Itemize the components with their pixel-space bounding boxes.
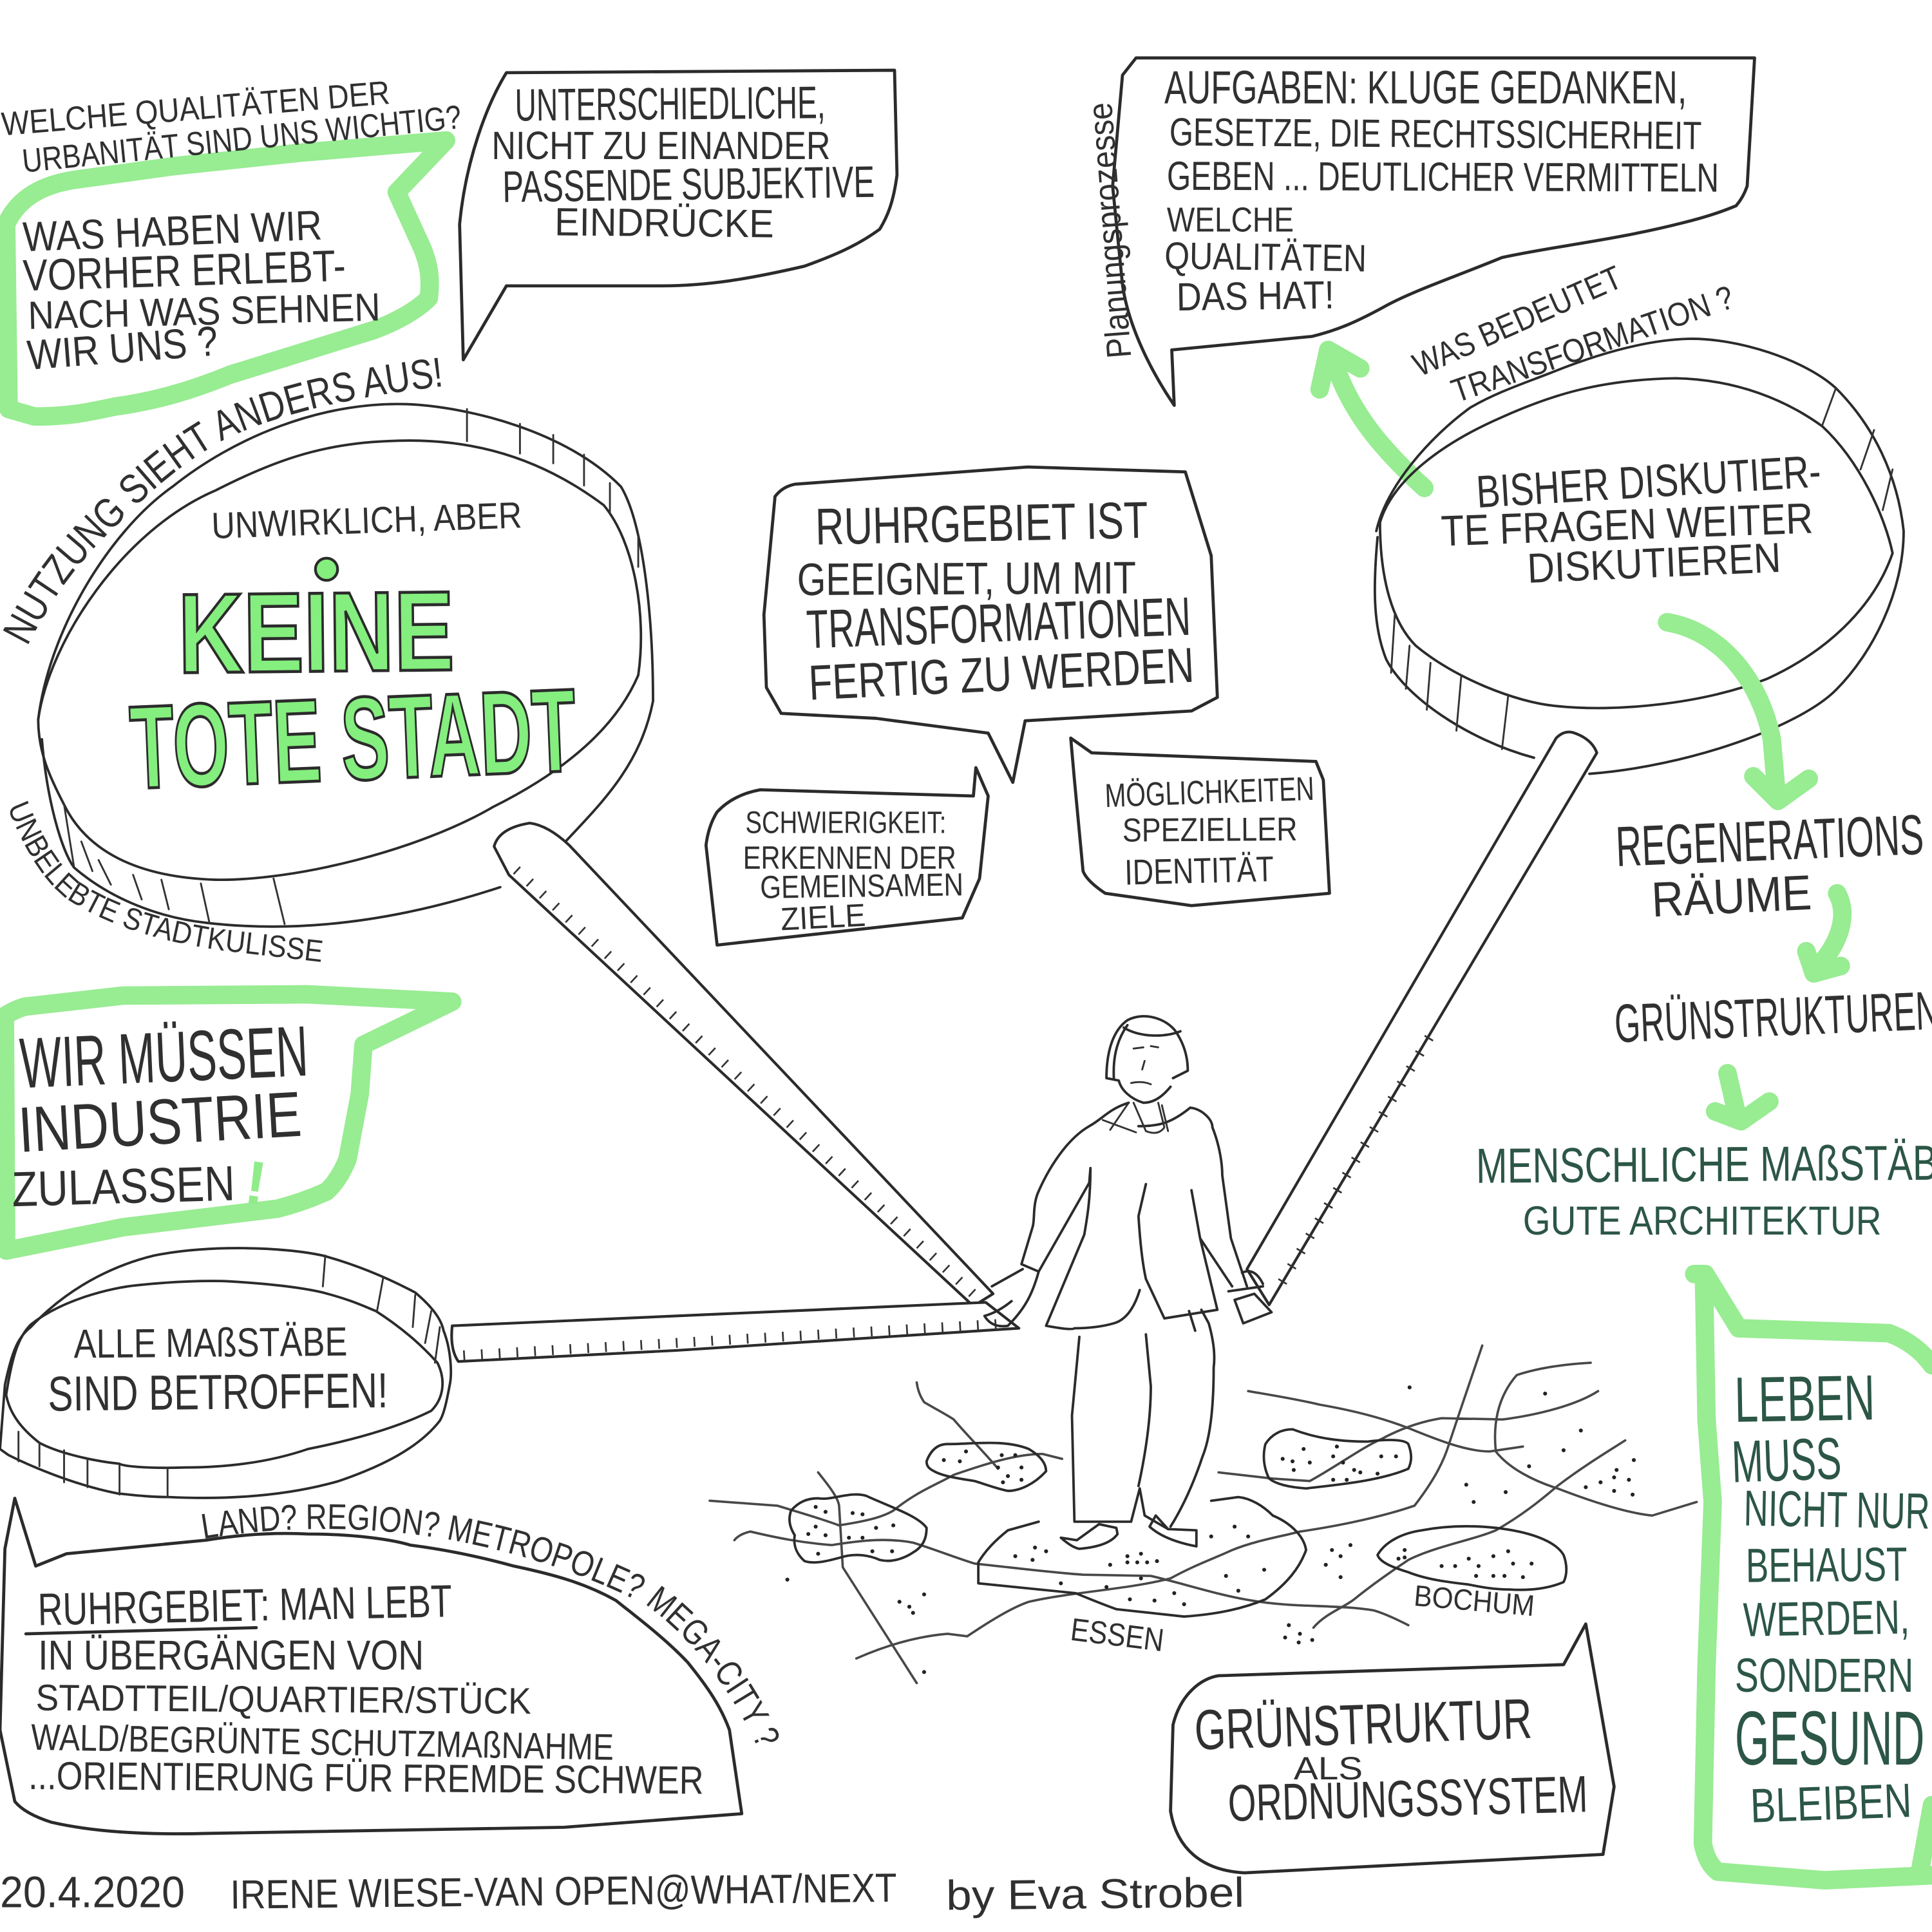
panel: semicircle bubble ruhrgebiet: WALD/BEGRÜNTE SCHUTZMAßNAHME — [31, 1717, 614, 1768]
label: was bedeutet transformation: TRANSFORMATION ? — [1446, 278, 1738, 410]
panel: semicircle bubble ruhrgebiet — [0, 1499, 742, 1834]
panel: green bubble industrie — [0, 994, 452, 1251]
trousers — [1072, 1310, 1215, 1529]
panel: semicircle bubble ruhrgebiet: ...ORIENTIERUNG FÜR FREMDE SCHWER — [28, 1754, 704, 1802]
city: small blob — [927, 1443, 1046, 1491]
panel: speech bubble identitaet: MÖGLICHKEITEN — [1104, 770, 1315, 814]
panel: center speech bubble: TRANSFORMATIONEN — [806, 586, 1191, 659]
panel: magnifier lens massstaebe: SIND BETROFFEN! — [48, 1363, 388, 1422]
label: curved land region metropole: LAND? REGION? METROPOLE? MEGA-CITY ? — [202, 1504, 779, 1743]
exclamation mark green: ! — [241, 1148, 270, 1219]
panel: magnifier lens right: BISHER DISKUTIER- — [1475, 446, 1823, 518]
panel: speech bubble identitaet: IDENTITÄT — [1124, 849, 1274, 893]
panel: speech bubble schwierigkeit: ZIELE — [780, 897, 866, 938]
handle: bottom magnifier — [451, 1302, 1019, 1361]
question: urban qualities: WELCHE QUALITÄTEN DER — [0, 73, 391, 142]
footer: date, speaker, author: IRENE WIESE-VAN OPEN@WHAT/NEXT — [230, 1866, 897, 1918]
panel: speech bubble identitaet — [1071, 738, 1329, 905]
panel: speech bubble gruenstruktur: ORDNUNGSSYSTEM — [1227, 1765, 1588, 1833]
panel: center speech bubble: RUHRGEBIET IST — [815, 491, 1148, 556]
panel: green speech bubble top left: WIR UNS ? — [25, 317, 220, 379]
label: curved stadtkulisse: UNBELEBTE STADTKULISSE — [10, 801, 323, 962]
footer: date, speaker, author: 20.4.2020 — [0, 1868, 185, 1917]
panel: semicircle bubble ruhrgebiet: RUHRGEBIET: MAN LEBT — [37, 1576, 452, 1636]
panel: speech bubble subjective impressions: EINDRÜCKE — [554, 200, 774, 245]
panel: speech bubble schwierigkeit: ERKENNEN DER — [743, 840, 956, 876]
panel: speech bubble aufgaben — [1113, 58, 1754, 405]
panel: green bubble industrie: WIR MÜSSEN — [18, 1011, 310, 1103]
hands — [985, 1269, 1271, 1326]
map dots — [788, 1387, 1634, 1672]
label: bochum: BOCHUM — [1413, 1578, 1536, 1622]
panel: green speech bubble top left: WAS HABEN WIR — [22, 202, 323, 260]
panel: speech bubble aufgaben: DAS HAT! — [1176, 273, 1334, 319]
handle: left magnifier — [494, 823, 993, 1306]
text: menschliche massstaebe: GUTE ARCHITEKTUR — [1523, 1198, 1882, 1244]
head and hair — [1106, 1016, 1188, 1103]
panel: speech bubble subjective impressions: UNTERSCHIEDLICHE, — [515, 77, 826, 131]
panel: speech bubble gruenstruktur — [1171, 1624, 1614, 1873]
panel: green bubble industrie: ZULASSEN — [11, 1156, 236, 1217]
text: regenerationsraeume — [1615, 802, 1925, 927]
panel: center speech bubble: GEEIGNET, UM MIT — [797, 553, 1136, 605]
panel: green bubble leben — [1694, 1274, 1932, 1880]
label: essen: ESSEN — [1068, 1611, 1166, 1658]
panel: green speech bubble top left — [6, 140, 446, 417]
map: ruhr cities — [710, 1345, 1697, 1683]
figure: person holding magnifiers — [985, 1016, 1271, 1549]
panel: semicircle bubble ruhrgebiet: STADTTEIL/QUARTIER/STÜCK — [35, 1678, 531, 1722]
text: menschliche massstaebe — [1476, 1135, 1932, 1244]
city: essen blob — [978, 1497, 1306, 1616]
footer: date, speaker, author: by Eva Strobel — [946, 1869, 1245, 1919]
panel: magnifier lens right: TE FRAGEN WEITER — [1440, 494, 1814, 556]
face and collar — [1103, 1046, 1168, 1133]
panel: speech bubble schwierigkeit: GEMEINSAMEN — [760, 866, 963, 905]
panel: speech bubble aufgaben: GEBEN ... DEUTLICHER VERMITTELN — [1167, 154, 1719, 201]
arrow: green small curve — [1806, 893, 1842, 973]
panel: speech bubble subjective impressions: NICHT ZU EINANDER — [491, 124, 831, 167]
city: bochum blob — [1378, 1526, 1566, 1590]
handle: right magnifier — [1247, 732, 1597, 1305]
panel: speech bubble aufgaben: GESETZE, DIE RECHTSSICHERHEIT — [1170, 110, 1702, 158]
panel: green bubble industrie: INDUSTRIE — [16, 1079, 303, 1166]
panel: center speech bubble: FERTIG ZU WERDEN — [808, 638, 1195, 711]
panel: speech bubble gruenstruktur: ALS — [1294, 1750, 1363, 1786]
city: left blob — [790, 1495, 927, 1562]
question: urban qualities: URBANITÄT SIND UNS WICHTIG? — [21, 98, 463, 180]
panel: speech bubble aufgaben: AUFGABEN: KLUGE GEDANKEN, — [1164, 62, 1687, 114]
heading: keine tote stadt — [128, 558, 578, 813]
text: regenerationsraeume: RÄUME — [1650, 866, 1813, 927]
footer: date, speaker, author — [0, 1866, 1245, 1919]
panel: speech bubble gruenstruktur: GRÜNSTRUKTUR — [1193, 1687, 1533, 1762]
panel: speech bubble subjective impressions: PASSENDE SUBJEKTIVE — [502, 157, 875, 212]
panel: semicircle bubble ruhrgebiet: IN ÜBERGÄNGEN VON — [38, 1631, 424, 1678]
panel: speech bubble schwierigkeit: SCHWIERIGKEIT: — [746, 806, 946, 840]
panel: magnifier lens right: DISKUTIEREN — [1526, 534, 1782, 592]
jacket — [1021, 1103, 1247, 1329]
panel: green bubble leben: MUSS — [1730, 1426, 1842, 1495]
arrow: green down — [1715, 1073, 1769, 1121]
city: upper blob — [1264, 1429, 1411, 1488]
panel: green speech bubble top left: VORHER ERLEBT- — [22, 241, 346, 301]
label: was bedeutet transformation: WAS BEDEUTET — [1407, 258, 1627, 384]
panel: speech bubble aufgaben: QUALITÄTEN — [1164, 234, 1367, 279]
label: planungsprozesse: Planungsprozesse — [1081, 101, 1139, 359]
panel: magnifier lens massstaebe: ALLE MAßSTÄBE — [73, 1320, 348, 1367]
panel: center speech bubble — [764, 467, 1217, 782]
panel: speech bubble schwierigkeit — [706, 768, 988, 945]
panel: speech bubble aufgaben: WELCHE — [1167, 202, 1294, 240]
label: unwirklich aber: UNWIRKLICH, ABER — [211, 495, 522, 547]
panel: magnifier lens right — [1375, 339, 1904, 774]
panel: speech bubble identitaet: SPEZIELLER — [1122, 810, 1298, 849]
heading: keine tote stadt: TOTE STADT — [128, 664, 578, 813]
panel: magnifier lens massstaebe — [0, 1248, 451, 1498]
shoes — [1061, 1515, 1197, 1549]
panel: speech bubble subjective impressions — [460, 70, 897, 360]
heading: keine tote stadt: KEINE — [178, 568, 455, 697]
panel: magnifier lens keine tote stadt — [3, 358, 679, 995]
arrow: green to aufgaben — [1320, 350, 1425, 488]
panel: green speech bubble top left: NACH WAS SEHNEN — [28, 285, 381, 337]
arrow: green to regenerationsraeume — [1667, 622, 1809, 801]
label: curved nutzung: NUTZUNG SIEHT ANDERS AUS! — [3, 358, 441, 644]
